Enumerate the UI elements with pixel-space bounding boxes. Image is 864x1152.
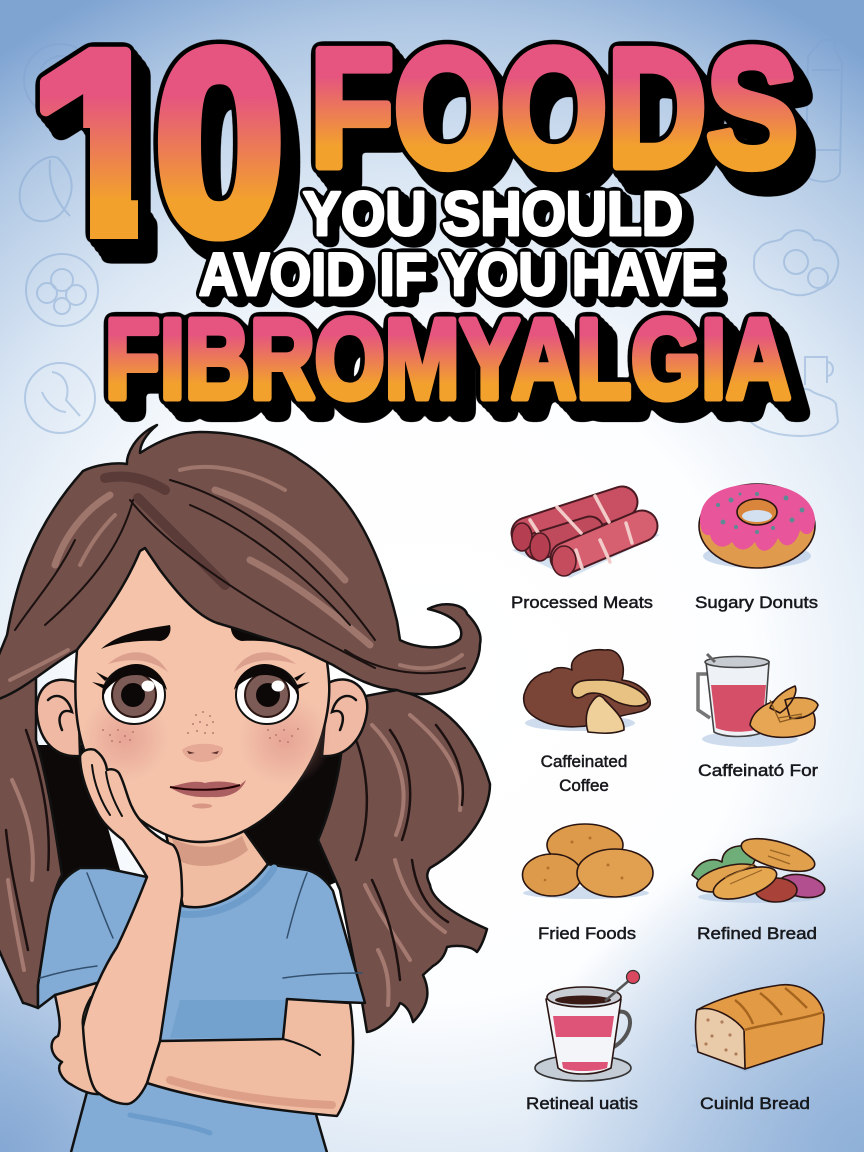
- hair strands lower: [6, 715, 463, 1005]
- food item: retineal uatis: [526, 970, 640, 1113]
- nose: [182, 744, 223, 762]
- label: Caffeinated Coffee: Coffee: [559, 776, 609, 795]
- label: Caffeinated Coffee: Caffeinated: [541, 752, 627, 771]
- icon: pink donut: [699, 484, 815, 568]
- label: Sugary Donuts: Sugary Donuts: [695, 593, 818, 612]
- food item: fried foods: [522, 824, 653, 943]
- title number: 10: [35, 39, 300, 264]
- label: Fried Foods: Fried Foods: [538, 924, 636, 943]
- label: Retineal uatis: Retineal uatis: [526, 1094, 638, 1113]
- left ear inner: [48, 696, 72, 730]
- food item: processed meats: [511, 496, 660, 612]
- icon: striped tea cup on saucer: [535, 970, 640, 1081]
- right ear inner: [332, 696, 356, 730]
- illustration: worried girl: [0, 425, 490, 1152]
- label: Caffeinató For: Caffeinató For: [698, 761, 818, 780]
- label: Processed Meats: Processed Meats: [511, 593, 653, 612]
- food grid: [511, 484, 827, 1113]
- neck: [165, 825, 268, 907]
- icon: brown clusters with beige pieces: [524, 650, 650, 733]
- eyebrows: [101, 625, 300, 649]
- left eye: [92, 664, 167, 724]
- title number: 10: 0: [154, 0, 285, 289]
- back hair right: [318, 690, 490, 1032]
- lip shadow: [192, 804, 212, 808]
- title line: YOU SHOULD: YOU SHOULD: [303, 180, 683, 249]
- title line: AVOID IF YOU HAVE: AVOID IF YOU HAVE: [199, 241, 717, 308]
- face: [75, 540, 329, 842]
- icon: meat rolls: [512, 496, 660, 578]
- icon: fried potatoes: [522, 824, 653, 899]
- food item: caffeinated coffee: [524, 650, 650, 795]
- nostrils: [187, 751, 219, 754]
- freckles: [102, 711, 299, 743]
- label: Cuinld Bread: Cuinld Bread: [700, 1094, 810, 1113]
- icon: glass of red drink with pastry: [698, 654, 818, 747]
- right ear: [322, 679, 367, 756]
- raised arm and hand: [80, 749, 182, 1104]
- ghost food doodles in background: [20, 40, 842, 436]
- label: Refined Bread: Refined Bread: [697, 924, 817, 943]
- neck shadow: [172, 836, 248, 866]
- far hand under arm: [52, 982, 100, 1094]
- back hair left: [0, 675, 62, 1008]
- shirt details: [40, 868, 362, 1133]
- icon: bread slices with greens: [692, 832, 827, 906]
- food item: caffeinato for: [698, 654, 818, 780]
- black shadow behind hair: [36, 730, 385, 900]
- food item: sugary donuts: [695, 484, 818, 612]
- near forearm: [147, 999, 353, 1116]
- food item: cuinld bread: [690, 985, 825, 1113]
- mouth: [170, 780, 246, 797]
- finger lines: [82, 765, 122, 1027]
- title number: 10: 1: [28, 0, 174, 289]
- forearm shading: [170, 1039, 332, 1105]
- right eye: [234, 664, 310, 724]
- blush: [81, 694, 169, 782]
- eyelid shadows: [108, 652, 296, 672]
- shirt: [38, 863, 365, 1152]
- left ear: [37, 680, 80, 756]
- hair shading and highlights: [10, 467, 465, 680]
- icon: loaf of bread: [690, 985, 825, 1072]
- mouth line: [170, 785, 240, 790]
- top hair: [0, 425, 480, 700]
- title: [28, 0, 798, 422]
- food item: refined bread: [692, 832, 827, 943]
